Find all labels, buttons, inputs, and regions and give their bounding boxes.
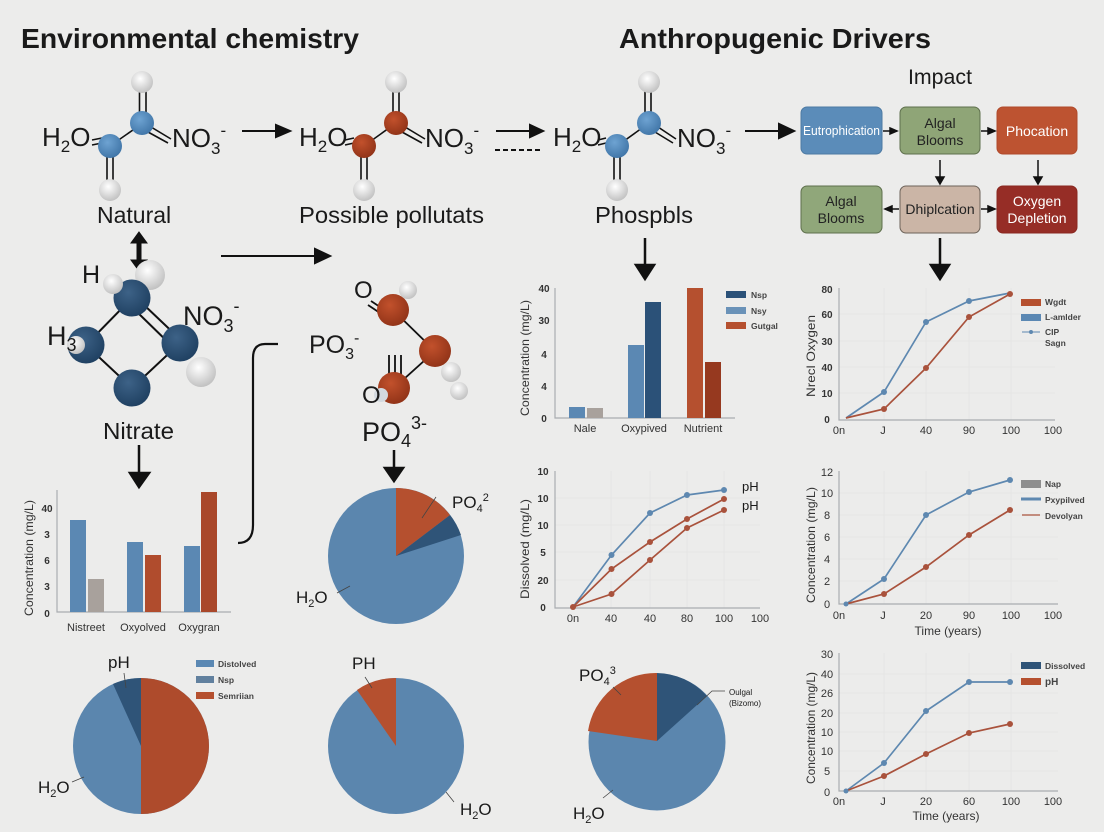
line chart: dissolved middle: 40 (644, 613, 656, 625)
bar chart: concentration middle: 4 (541, 350, 547, 361)
line chart: dissolved middle (518, 467, 769, 625)
pie chart: PO4 bottom: Oulgal (729, 688, 752, 697)
molecule: natural: 3 (211, 139, 220, 158)
box: Phocation: Phocation (1006, 123, 1068, 139)
bar chart: concentration middle: Oxypived (621, 423, 667, 435)
pie chart: PH centre: 2 (472, 810, 478, 822)
box: Algal Blooms bottom: Blooms (818, 210, 864, 226)
arrow: phosphorus down (636, 238, 654, 279)
line chart: concentration bottom right: 20 (821, 708, 833, 720)
line chart: dissolved middle: pH (742, 479, 759, 494)
line chart: dissolved middle: 100 (715, 613, 733, 625)
line chart: concentration bottom right (804, 649, 1085, 823)
bar chart: concentration left: 6 (44, 556, 50, 567)
molecule: nitrate: NO (183, 301, 224, 331)
legend: left pie: Semriian (218, 691, 254, 701)
label: PO4 3-: 4 (401, 431, 411, 451)
pie chart: PO4 bottom: 2 (585, 814, 591, 826)
pie chart: PH centre: H (460, 800, 472, 819)
line chart: concentration bottom right: 0n (833, 796, 845, 808)
bar chart: concentration middle: Nale (574, 423, 596, 435)
box: Eutrophication: Eutrophication (803, 123, 880, 138)
line chart: concentration right middle: 2 (824, 576, 830, 588)
molecule: phosphorus: 2 (572, 137, 581, 156)
line chart: concentration right middle: 0 (824, 599, 830, 611)
line chart: oxygen top right: CIP (1045, 327, 1060, 337)
pie chart: PH centre: PH (352, 654, 376, 673)
line chart: dissolved middle: 0n (567, 613, 579, 625)
box: Algal Blooms top (900, 107, 980, 154)
line chart: dissolved middle: 20 (537, 576, 549, 587)
box: Algal Blooms top: Algal (924, 115, 956, 131)
line chart: dissolved middle: 80 (681, 613, 693, 625)
molecule: phosphate (309, 277, 468, 409)
flow arrows (883, 128, 1042, 212)
line chart: concentration right middle: Devolyan (1045, 511, 1083, 521)
molecule: phosphorus: NO (677, 123, 716, 153)
pie chart: pH left (38, 653, 209, 814)
line chart: concentration bottom right: 100 (1002, 796, 1020, 808)
line chart: concentration bottom right: 60 (963, 796, 975, 808)
molecule: phosphorus: O (581, 122, 601, 152)
molecule: nitrate (47, 260, 240, 406)
pie chart: PO4: O (314, 588, 328, 607)
molecule: possible pollutants: 3 (464, 139, 473, 158)
line chart: concentration right middle: Concentration (mg/L) (804, 487, 818, 603)
line chart: concentration bottom right: 5 (824, 766, 830, 778)
line chart: dissolved middle: 100 (751, 613, 769, 625)
bar chart: concentration middle: Concentration (mg/L) (518, 300, 532, 416)
arrow: to impact flow (745, 124, 794, 138)
line chart: oxygen top right: 80 (821, 285, 833, 296)
heading: Impact: Impact (908, 66, 972, 89)
line chart: dissolved middle: 40 (605, 613, 617, 625)
line chart: concentration right middle: Time (years) (915, 624, 981, 638)
label: Natural: Natural (97, 202, 171, 228)
label: Possible pollutants: Possible pollutats (299, 202, 484, 228)
line chart: concentration bottom right: 20 (920, 796, 932, 808)
molecule: possible pollutants: O (327, 122, 347, 152)
label: PO4 3-: PO (362, 417, 401, 447)
pie chart: PH centre (328, 654, 492, 822)
line chart: concentration bottom right: 0 (824, 787, 830, 799)
arrow: pollutants to phosphorus with dashed line (495, 125, 543, 150)
line chart: concentration bottom right: Time (years) (913, 809, 979, 823)
pie chart: PO4 bottom: 3 (610, 665, 616, 677)
legend: left pie (196, 659, 256, 701)
pie chart: pH left: O (56, 778, 70, 797)
pie chart: PO4: PO (452, 493, 477, 512)
molecule: phosphorus (553, 71, 731, 201)
pie chart: PO4: H (296, 588, 308, 607)
connector: curved bracket (238, 344, 278, 543)
flow diagram: impact (801, 107, 1077, 233)
line chart: oxygen top right: 40 (821, 363, 833, 374)
line chart: dissolved middle: 10 (537, 521, 549, 532)
box: Oxygen Depletion: Depletion (1007, 210, 1067, 226)
line chart: oxygen top right (804, 285, 1082, 437)
box: Algal Blooms bottom (801, 186, 882, 233)
legend: left pie: Distolved (218, 659, 256, 669)
arrow: nitrate down (130, 445, 149, 487)
line chart: oxygen top right: 100 (1044, 425, 1062, 437)
molecule: phosphate: - (354, 330, 359, 347)
label: PO4 3-: 3- (411, 413, 427, 433)
molecule: phosphate: 3 (345, 346, 354, 363)
bar chart: concentration left: 3 (44, 582, 50, 593)
molecule: phosphate: PO (309, 331, 345, 359)
box: Algal Blooms bottom: Algal (825, 193, 857, 209)
bar chart: concentration left: Oxyolved (120, 622, 166, 634)
box: Eutrophication (801, 107, 882, 154)
line chart: oxygen top right: Sagn (1045, 338, 1066, 348)
line chart: dissolved middle: 5 (540, 548, 546, 559)
line chart: oxygen top right: Nrecl Oxygen (804, 315, 818, 397)
line chart: oxygen top right: 40 (920, 425, 932, 437)
pie chart: PO4: 2 (308, 598, 314, 610)
bar chart: concentration middle: Nutrient (684, 423, 722, 435)
line chart: oxygen top right: J (880, 425, 886, 437)
line chart: concentration right middle: 8 (824, 510, 830, 522)
bar chart: concentration left: Oxygran (178, 622, 220, 634)
pie chart: PO4 (296, 488, 489, 624)
line chart: dissolved middle: pH (742, 498, 759, 513)
title: Environmental chemistry: Environmental chemistry (21, 23, 359, 54)
pie chart: PO4 bottom: 4 (604, 676, 610, 688)
box: Oxygen Depletion (997, 186, 1077, 233)
molecule: nitrate: - (234, 296, 240, 316)
bar chart: concentration left: 40 (41, 504, 53, 515)
line chart: oxygen top right: Wgdt (1045, 297, 1066, 307)
arrow: phosphate down (385, 450, 403, 481)
pie chart: PO4 bottom (573, 665, 761, 826)
molecule: natural: 2 (61, 137, 70, 156)
line chart: concentration bottom right: 10 (821, 727, 833, 739)
line chart: concentration right middle: 90 (963, 610, 975, 622)
bar chart: concentration left: Nistreet (67, 622, 105, 634)
bar chart: concentration middle: 4 (541, 382, 547, 393)
bar chart: concentration middle: Gutgal (751, 321, 778, 331)
line chart: concentration right middle: 10 (821, 488, 833, 500)
pie chart: PO4: 4 (477, 503, 483, 515)
pie chart: PO4 bottom: PO (579, 666, 604, 685)
line chart: concentration bottom right: 26 (821, 688, 833, 700)
box: Phocation (997, 107, 1077, 154)
molecule: nitrate: H (82, 261, 100, 289)
pie chart: pH left: pH (108, 653, 130, 672)
line chart: concentration bottom right: Concentration (mg/L) (804, 672, 818, 784)
molecule: possible pollutants: H (299, 122, 318, 152)
line chart: concentration right middle: 20 (920, 610, 932, 622)
molecule: possible pollutants: 2 (318, 137, 327, 156)
arrow: nitrate to phosphate (221, 249, 330, 263)
bar chart: concentration middle: Nsp (751, 290, 767, 300)
bar chart: concentration left: 3 (44, 530, 50, 541)
line chart: concentration right middle: 4 (824, 554, 830, 566)
bar chart: concentration middle: 40 (538, 284, 550, 295)
box: Dhiplication: Dhiplcation (905, 201, 975, 217)
molecule: natural: NO (172, 123, 211, 153)
line chart: dissolved middle: 0 (540, 603, 546, 614)
line chart: oxygen top right: 90 (963, 425, 975, 437)
pie chart: PO4 bottom: H (573, 804, 585, 823)
molecule: nitrate: H (47, 321, 66, 351)
molecule: possible pollutants: - (473, 121, 479, 140)
line chart: concentration right middle: 0n (833, 610, 845, 622)
line chart: oxygen top right: 10 (821, 389, 833, 400)
line chart: oxygen top right: 0 (824, 415, 830, 426)
line chart: concentration right middle: Pxypilved (1045, 495, 1085, 505)
title: Anthropogenic Drivers: Anthropugenic Drivers (619, 23, 931, 54)
molecule: natural (42, 71, 226, 201)
bar chart: concentration left: Concentration (mg/L) (22, 500, 36, 616)
line chart: concentration right middle: 100 (1002, 610, 1020, 622)
line chart: concentration bottom right: Dissolved (1045, 661, 1085, 671)
line chart: concentration right middle: 12 (821, 467, 833, 479)
bar chart: concentration middle: 0 (541, 414, 547, 425)
legend: left pie: Nsp (218, 675, 234, 685)
box: Algal Blooms top: Blooms (917, 132, 963, 148)
line chart: concentration right middle: J (880, 610, 886, 622)
arrow: double headed natural-nitrate (131, 232, 147, 271)
bar chart: concentration left (22, 490, 231, 634)
pie chart: pH left: 2 (50, 788, 56, 800)
line chart: concentration bottom right: 30 (821, 649, 833, 661)
line chart: concentration bottom right: 100 (1044, 796, 1062, 808)
molecule: phosphorus: 3 (716, 139, 725, 158)
molecule: natural: - (220, 121, 226, 140)
molecule: possible pollutants: NO (425, 123, 464, 153)
line chart: dissolved middle: 10 (537, 467, 549, 478)
molecule: possible pollutants (299, 71, 479, 201)
pie chart: PH centre: O (478, 800, 492, 819)
line chart: oxygen top right: 60 (821, 310, 833, 321)
pie chart: PO4 bottom: O (591, 804, 605, 823)
molecule: phosphate: O (354, 277, 373, 304)
line chart: oxygen top right: 100 (1002, 425, 1020, 437)
line chart: dissolved middle: 10 (537, 494, 549, 505)
line chart: concentration right middle (804, 467, 1085, 638)
label: Phosphorus: Phospbls (595, 202, 693, 228)
molecule: natural: H (42, 122, 61, 152)
line chart: concentration bottom right: 10 (821, 746, 833, 758)
box: Dhiplication (900, 186, 980, 233)
arrow: natural to pollutants (242, 125, 290, 137)
pie chart: pH left: H (38, 778, 50, 797)
line chart: oxygen top right: 0n (833, 425, 845, 437)
bar chart: concentration middle: Nsy (751, 306, 767, 316)
pie chart: PO4: 2 (483, 492, 489, 504)
line chart: concentration right middle: 6 (824, 532, 830, 544)
bar chart: concentration middle: 30 (538, 316, 550, 327)
line chart: oxygen top right: L-amlder (1045, 312, 1082, 322)
label: Nitrate: Nitrate (103, 418, 174, 444)
molecule: phosphate: O (362, 382, 381, 409)
bar chart: concentration middle (518, 284, 778, 435)
line chart: concentration bottom right: 40 (821, 669, 833, 681)
line chart: concentration bottom right: J (880, 796, 886, 808)
molecule: natural: O (70, 122, 90, 152)
line chart: concentration right middle: 100 (1044, 610, 1062, 622)
line chart: dissolved middle: Dissolved (mg/L) (518, 499, 532, 599)
molecule: nitrate: 3 (66, 335, 77, 355)
pie chart: PO4 bottom: (Bizomo) (729, 699, 761, 708)
line chart: concentration right middle: Nap (1045, 479, 1061, 489)
line chart: oxygen top right: 30 (821, 337, 833, 348)
molecule: phosphorus: - (725, 121, 731, 140)
bar chart: concentration left: 0 (44, 609, 50, 620)
molecule: nitrate: 3 (224, 316, 234, 336)
molecule: phosphorus: H (553, 122, 572, 152)
box: Oxygen Depletion: Oxygen (1013, 193, 1061, 209)
line chart: concentration bottom right: pH (1045, 677, 1058, 688)
arrow: impact down (931, 238, 949, 279)
